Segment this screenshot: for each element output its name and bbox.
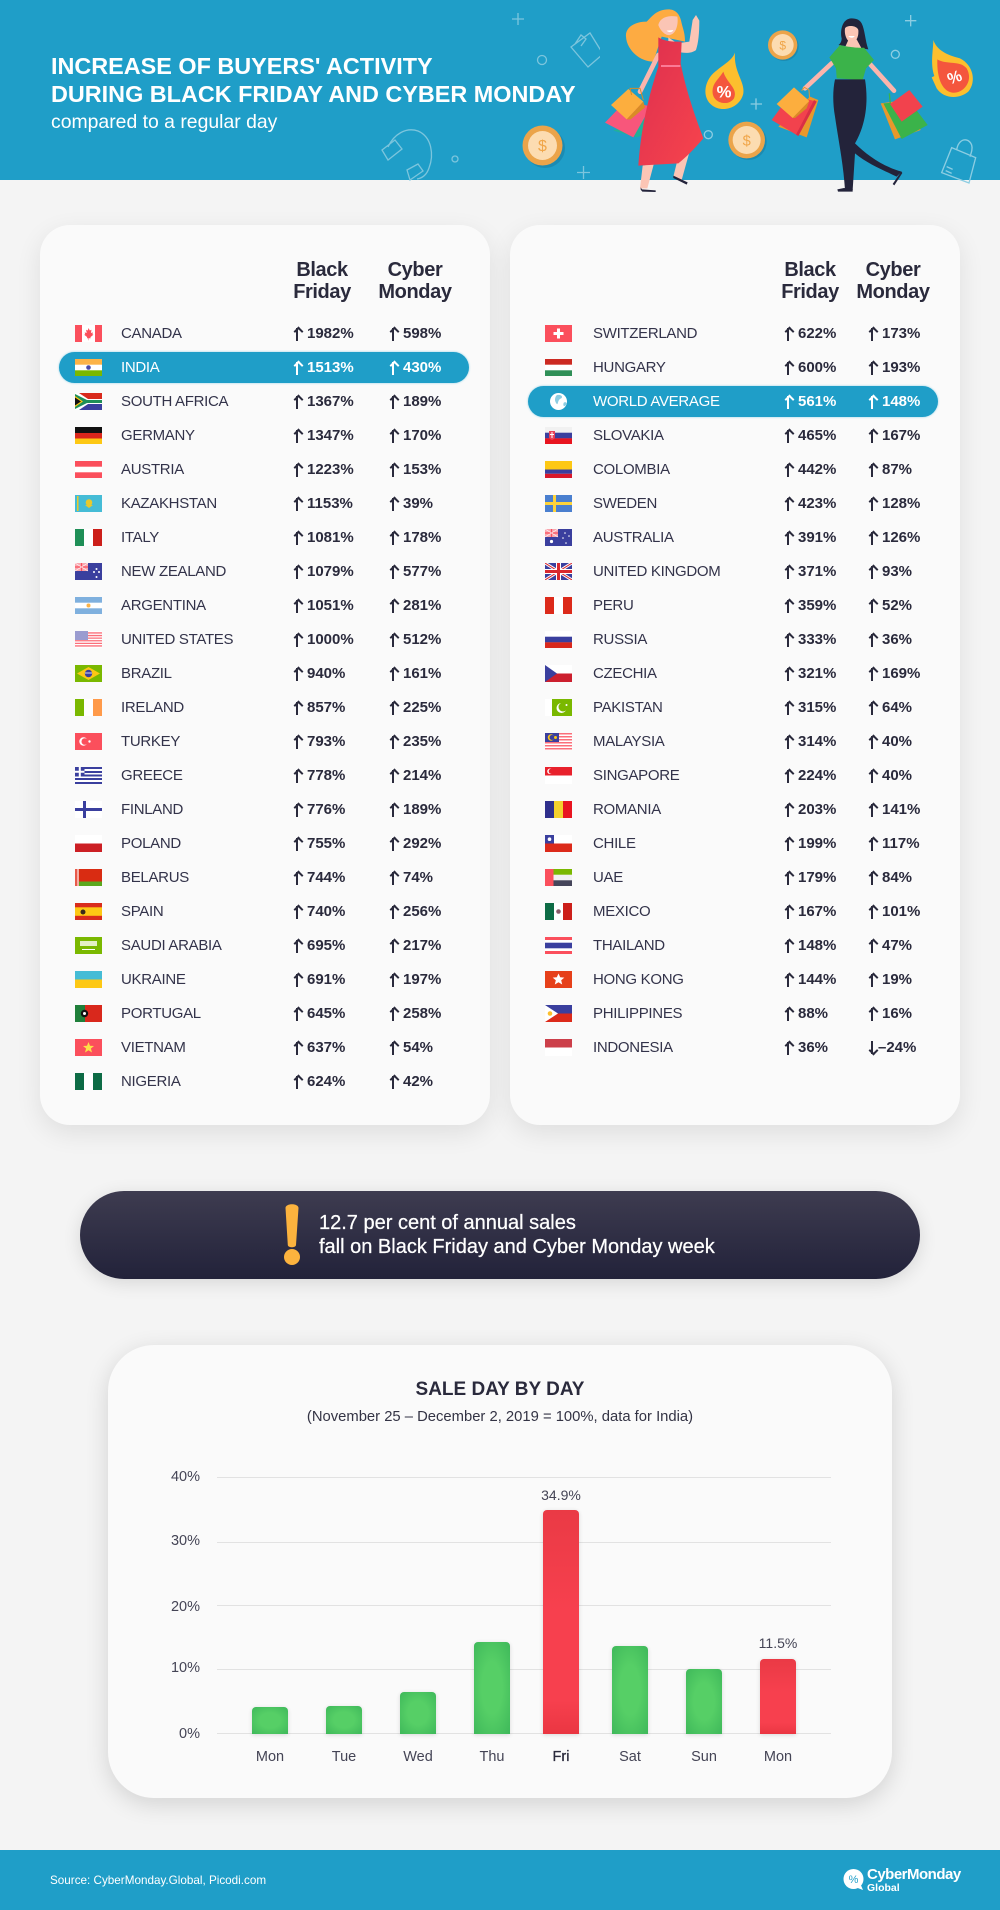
coin top: [768, 30, 799, 61]
woman in red dress: [605, 9, 703, 192]
row: Peru: 52%: [882, 597, 912, 614]
column heading: Cyber Monday left: Cyber: [388, 259, 442, 281]
row: Malaysia: [510, 733, 960, 750]
row: Belarus: 744%: [307, 869, 345, 886]
row: Saudi Arabia: 695%: [307, 937, 345, 954]
subtitle: compared to a regular day: [51, 111, 277, 133]
y axis label 20%: 20%: [171, 1599, 200, 1615]
flag: Australia: [545, 529, 572, 546]
x label Thu: Thu: [480, 1749, 504, 1765]
title: INCREASE OF BUYERS' ACTIVITY: [51, 53, 433, 79]
row: Chile: 117%: [882, 835, 920, 852]
row: Hong Kong: 19%: [882, 971, 912, 988]
highlight: World average row: [528, 386, 938, 417]
row: Hungary: HUNGARY: [593, 359, 666, 376]
row: Belarus: BELARUS: [121, 869, 189, 886]
row: Turkey: 793%: [307, 733, 345, 750]
column heading: Cyber Monday left: [378, 259, 452, 303]
row: Nigeria: NIGERIA: [121, 1073, 181, 1090]
row: Malaysia: 40%: [882, 733, 912, 750]
row: Hong Kong: 144%: [798, 971, 836, 988]
flag: Finland: [75, 801, 102, 818]
row: Saudi Arabia: 217%: [403, 937, 441, 954]
row: New Zealand: 1079%: [307, 563, 354, 580]
logo: CyberMonday Global: [843, 1867, 963, 1895]
flag: Chile: [545, 835, 572, 852]
row: Indonesia: –24%: [878, 1039, 916, 1056]
bar: Sat: [612, 1646, 648, 1734]
callout text: 12.7 per cent of annual sales: [319, 1212, 576, 1234]
row: Russia: RUSSIA: [593, 631, 647, 648]
flag: India: [75, 359, 102, 376]
row: Nigeria: 624%: [307, 1073, 345, 1090]
flag: Belarus: [75, 869, 102, 886]
row: United States: 512%: [403, 631, 441, 648]
flag: Germany: [75, 427, 102, 444]
x label Mon: Mon: [764, 1749, 792, 1765]
row: Mexico: MEXICO: [593, 903, 650, 920]
row: Hungary: [510, 359, 960, 376]
row: Mexico: [510, 903, 960, 920]
row: Austria: 1223%: [307, 461, 354, 478]
row: Singapore: [510, 767, 960, 784]
flag: Sweden: [545, 495, 572, 512]
row: World average: WORLD AVERAGE: [593, 393, 720, 410]
coin left: $: [538, 138, 547, 155]
row: Russia: 333%: [798, 631, 836, 648]
row: Belarus: [40, 869, 490, 886]
flag: Spain: [75, 903, 102, 920]
row: Vietnam: VIETNAM: [121, 1039, 186, 1056]
row: Poland: [75, 835, 441, 852]
row: Brazil: BRAZIL: [121, 665, 172, 682]
row: UAE: [510, 869, 960, 886]
row: Spain: [40, 903, 490, 920]
row: South Africa: SOUTH AFRICA: [121, 393, 228, 410]
icon: globe: [545, 393, 572, 410]
coin left: [522, 126, 565, 168]
row: India: 1513%: [307, 359, 354, 376]
row: Portugal: PORTUGAL: [121, 1005, 201, 1022]
discount flame left: %: [717, 82, 732, 101]
flag: Canada: [75, 325, 102, 342]
row: New Zealand: NEW ZEALAND: [121, 563, 226, 580]
discount flame left: [705, 53, 743, 109]
logo: CyberMonday Global: %: [849, 1874, 859, 1886]
row: World average: 561%: [798, 393, 836, 410]
column heading: Black Friday right: Black: [784, 259, 836, 281]
row: Sweden: 423%: [798, 495, 836, 512]
row: Romania: [510, 801, 960, 818]
y axis label 30%: 30%: [171, 1533, 200, 1549]
column heading: Black Friday left: Black: [296, 259, 348, 281]
row: Sweden: 128%: [882, 495, 920, 512]
flag: Saudi Arabia: [75, 937, 102, 954]
row: Ukraine: [40, 971, 490, 988]
row: Czechia: CZECHIA: [593, 665, 657, 682]
flag: Romania: [545, 801, 572, 818]
bar: Fri: [543, 1510, 579, 1734]
chart subtitle: (November 25 – December 2, 2019 = 100%, data for India): [307, 1409, 693, 1425]
row: Russia: 36%: [882, 631, 912, 648]
row: Romania: 203%: [798, 801, 836, 818]
row: Thailand: THAILAND: [593, 937, 665, 954]
flag: Argentina: [75, 597, 102, 614]
flag: Italy: [75, 529, 102, 546]
flag: United States: [75, 631, 102, 647]
row: Hungary: 600%: [798, 359, 836, 376]
row: Poland: 292%: [403, 835, 441, 852]
row: Vietnam: 54%: [403, 1039, 433, 1056]
row: UAE: 179%: [798, 869, 836, 886]
row: United States: 1000%: [307, 631, 354, 648]
flag: Colombia: [545, 461, 572, 478]
flag: Ireland: [75, 699, 102, 716]
row: Germany: GERMANY: [121, 427, 195, 444]
row: Italy: ITALY: [121, 529, 159, 546]
flag: Singapore: [545, 767, 572, 784]
row: Pakistan: 315%: [798, 699, 836, 716]
row: Malaysia: 314%: [798, 733, 836, 750]
row: Vietnam: [40, 1039, 490, 1056]
row: United Kingdom: [510, 563, 960, 580]
row: UAE: 84%: [882, 869, 912, 886]
row: Chile: 199%: [798, 835, 836, 852]
row: Czechia: 321%: [798, 665, 836, 682]
row: Peru: 359%: [798, 597, 836, 614]
bar: Tue: [326, 1706, 362, 1734]
flag: Nigeria: [75, 1073, 102, 1090]
row: Philippines: 88%: [798, 1005, 828, 1022]
x label Tue: Tue: [332, 1749, 356, 1765]
row: Czechia: [510, 665, 960, 682]
row: Ukraine: 197%: [403, 971, 441, 988]
row: Canada: CANADA: [121, 325, 182, 342]
row: India: INDIA: [121, 359, 160, 376]
row: Poland: POLAND: [121, 835, 181, 852]
flag: South Africa: [75, 393, 102, 410]
row: South Africa: [75, 393, 441, 410]
row: Saudi Arabia: SAUDI ARABIA: [121, 937, 222, 954]
row: Pakistan: [510, 699, 960, 716]
callout text: fall on Black Friday and Cyber Monday week: [319, 1236, 715, 1258]
row: Philippines: PHILIPPINES: [593, 1005, 682, 1022]
row: Colombia: 87%: [882, 461, 912, 478]
row: Greece: GREECE: [121, 767, 183, 784]
row: Thailand: 148%: [798, 937, 836, 954]
flag: Brazil: [75, 665, 102, 682]
row: Germany: 170%: [403, 427, 441, 444]
row: Turkey: 235%: [403, 733, 441, 750]
row: Hungary: 193%: [882, 359, 920, 376]
flag: Malaysia: [545, 733, 572, 750]
row: Switzerland: 622%: [798, 325, 836, 342]
row: Indonesia: INDONESIA: [593, 1039, 673, 1056]
row: Argentina: ARGENTINA: [121, 597, 206, 614]
row: Nigeria: [40, 1073, 490, 1090]
flag: Thailand: [545, 937, 572, 954]
row: New Zealand: [75, 563, 441, 580]
flag: New Zealand: [75, 563, 102, 580]
row: Mexico: 167%: [798, 903, 836, 920]
panel: left table: [40, 225, 490, 1125]
flag: Hungary: [545, 359, 572, 376]
row: Slovakia: SLOVAKIA: [593, 427, 664, 444]
callout text: [319, 1211, 715, 1259]
bar: Thu: [474, 1642, 510, 1734]
row: Belarus: 74%: [403, 869, 433, 886]
column heading: Cyber Monday right: Monday: [856, 281, 930, 303]
row: Nigeria: 42%: [403, 1073, 433, 1090]
row: Greece: 214%: [403, 767, 441, 784]
row: Slovakia: [510, 427, 960, 444]
row: Indonesia: [510, 1039, 960, 1056]
row: Kazakhstan: KAZAKHSTAN: [121, 495, 217, 512]
row: Kazakhstan: 39%: [403, 495, 433, 512]
row: Australia: 126%: [882, 529, 920, 546]
row: Colombia: COLOMBIA: [593, 461, 670, 478]
row: United States: UNITED STATES: [121, 631, 233, 648]
source text: Source: CyberMonday.Global, Picodi.com: [50, 1874, 266, 1887]
y axis label 0%: 0%: [179, 1726, 200, 1742]
decorations: [704, 15, 976, 183]
column heading: Cyber Monday left: Monday: [378, 281, 452, 303]
row: Chile: CHILE: [593, 835, 636, 852]
row: Greece: [75, 767, 441, 784]
row: Spain: 256%: [403, 903, 441, 920]
row: Spain: 740%: [307, 903, 345, 920]
row: Colombia: [510, 461, 960, 478]
flag: Indonesia: [545, 1039, 572, 1056]
row: Indonesia: 36%: [798, 1039, 828, 1056]
flag: Pakistan: [545, 699, 572, 716]
flag: Kazakhstan: [75, 495, 102, 512]
row: United States: [75, 631, 441, 648]
row: Mexico: 101%: [882, 903, 920, 920]
row: Romania: 141%: [882, 801, 920, 818]
row: Ireland: IRELAND: [121, 699, 184, 716]
icon: decorative outline shopping items: [381, 13, 600, 181]
value label 11.5%: 11.5%: [759, 1635, 797, 1651]
row: Finland: FINLAND: [121, 801, 183, 818]
flag: Turkey: [75, 733, 102, 750]
flag: Philippines: [545, 1005, 572, 1022]
row: Ukraine: UKRAINE: [121, 971, 186, 988]
row: New Zealand: 577%: [403, 563, 441, 580]
bar: Mon: [252, 1707, 288, 1734]
column heading: Black Friday right: [781, 259, 840, 303]
row: Finland: [75, 801, 441, 818]
row: Canada: 1982%: [307, 325, 354, 342]
row: Germany: 1347%: [307, 427, 354, 444]
row: Austria: AUSTRIA: [121, 461, 184, 478]
row: Saudi Arabia: [40, 937, 490, 954]
logo: CyberMonday Global: CyberMonday: [867, 1866, 961, 1883]
row: Italy: 1081%: [307, 529, 354, 546]
y axis label 40%: 40%: [171, 1469, 200, 1485]
row: Singapore: 40%: [882, 767, 912, 784]
row: Argentina: 281%: [403, 597, 441, 614]
coin top: $: [779, 38, 786, 52]
row: Thailand: 47%: [882, 937, 912, 954]
row: Ireland: [75, 699, 441, 716]
row: Philippines: 16%: [882, 1005, 912, 1022]
x label Fri: Fri: [553, 1749, 569, 1765]
title: [51, 53, 576, 107]
row: Finland: 776%: [307, 801, 345, 818]
row: Romania: ROMANIA: [593, 801, 661, 818]
x label Sat: Sat: [619, 1749, 641, 1765]
panel: right table: [510, 225, 960, 1125]
highlight: India row: [59, 352, 469, 383]
flag: Portugal: [75, 1005, 102, 1022]
logo: CyberMonday Global: Global: [867, 1882, 900, 1894]
woman in green top: [772, 18, 928, 192]
row: Malaysia: MALAYSIA: [593, 733, 665, 750]
column heading: Cyber Monday right: [856, 259, 930, 303]
row: Italy: [75, 529, 441, 546]
row: Czechia: 169%: [882, 665, 920, 682]
row: Australia: AUSTRALIA: [593, 529, 674, 546]
row: Switzerland: SWITZERLAND: [593, 325, 697, 342]
row: Germany: [75, 427, 441, 444]
row: South Africa: 189%: [403, 393, 441, 410]
row: Colombia: 442%: [798, 461, 836, 478]
row: Sweden: SWEDEN: [593, 495, 657, 512]
row: Switzerland: [510, 325, 960, 342]
row: Peru: [510, 597, 960, 614]
row: Vietnam: 637%: [307, 1039, 345, 1056]
row: Kazakhstan: 1153%: [307, 495, 353, 512]
flag: Greece: [75, 767, 102, 784]
row: Greece: 778%: [307, 767, 345, 784]
row: India: [75, 359, 441, 376]
row: Austria: [75, 461, 441, 478]
row: Portugal: 645%: [307, 1005, 345, 1022]
chart title: SALE DAY BY DAY: [416, 1379, 584, 1400]
flag: Hong Kong: [545, 971, 572, 988]
flag: Vietnam: [75, 1039, 102, 1056]
flag: Austria: [75, 461, 102, 478]
row: Argentina: [75, 597, 441, 614]
row: Slovakia: 465%: [798, 427, 836, 444]
flag: Slovakia: [545, 427, 572, 444]
row: Philippines: [510, 1005, 960, 1022]
flag: Mexico: [545, 903, 572, 920]
row: Brazil: 161%: [403, 665, 441, 682]
row: UAE: UAE: [593, 869, 623, 886]
discount flame right: %: [945, 68, 965, 89]
row: World average: 148%: [882, 393, 920, 410]
x label Wed: Wed: [403, 1749, 433, 1765]
row: Australia: [510, 529, 960, 546]
row: Portugal: [40, 1005, 490, 1022]
row: Chile: [510, 835, 960, 852]
row: Brazil: [75, 665, 441, 682]
coin bottom: [728, 122, 767, 160]
coin bottom: $: [743, 133, 751, 149]
column heading: Cyber Monday right: Cyber: [866, 259, 920, 281]
icon: exclamation mark: [283, 1204, 301, 1266]
row: Slovakia: 167%: [882, 427, 920, 444]
row: Australia: 391%: [798, 529, 836, 546]
row: Italy: 178%: [403, 529, 441, 546]
flag: United Kingdom: [545, 563, 572, 580]
row: Kazakhstan: [75, 495, 433, 512]
row: Ireland: 225%: [403, 699, 441, 716]
row: Poland: 755%: [307, 835, 345, 852]
flag: Poland: [75, 844, 102, 852]
bar: Sun: [686, 1669, 722, 1734]
row: Hong Kong: [510, 971, 960, 988]
column heading: Black Friday left: [293, 259, 352, 303]
value label 34.9%: 34.9%: [541, 1487, 581, 1503]
row: Canada: 598%: [403, 325, 441, 342]
row: Ireland: 857%: [307, 699, 345, 716]
row: Turkey: [75, 733, 441, 750]
column heading: Black Friday right: Friday: [781, 281, 839, 303]
row: World average: [510, 393, 960, 410]
row: Portugal: 258%: [403, 1005, 441, 1022]
flag: UAE: [545, 869, 572, 886]
row: Spain: SPAIN: [121, 903, 163, 920]
row: Pakistan: 64%: [882, 699, 912, 716]
row: Ukraine: 691%: [307, 971, 345, 988]
row: South Africa: 1367%: [307, 393, 354, 410]
callout: [80, 1191, 920, 1279]
illustration: shoppers, coins and discount flames: [605, 9, 976, 192]
column heading: Black Friday left: Friday: [293, 281, 351, 303]
row: Thailand: [510, 937, 960, 954]
discount flame right: [932, 40, 973, 97]
x label Mon: Mon: [256, 1749, 284, 1765]
header banner: [0, 0, 1000, 180]
row: United Kingdom: 371%: [798, 563, 836, 580]
y axis label 10%: 10%: [171, 1660, 200, 1676]
row: United Kingdom: UNITED KINGDOM: [593, 563, 720, 580]
flag: Russia: [545, 631, 572, 648]
row: Singapore: SINGAPORE: [593, 767, 680, 784]
row: Austria: 153%: [403, 461, 441, 478]
row: Sweden: [510, 495, 960, 512]
row: Canada: [75, 325, 441, 342]
row: Turkey: TURKEY: [121, 733, 180, 750]
title: DURING BLACK FRIDAY AND CYBER MONDAY: [51, 81, 576, 107]
row: Hong Kong: HONG KONG: [593, 971, 684, 988]
bar: Cyber Mon: [760, 1659, 796, 1734]
row: Brazil: 940%: [307, 665, 345, 682]
row: Switzerland: 173%: [882, 325, 920, 342]
bar: Wed: [400, 1692, 436, 1734]
row: Argentina: 1051%: [307, 597, 354, 614]
row: Russia: [510, 631, 960, 648]
panel: sale day by day chart: [108, 1345, 892, 1798]
row: Peru: PERU: [593, 597, 633, 614]
footer: [0, 1850, 1000, 1910]
row: Finland: 189%: [403, 801, 441, 818]
flag: Ukraine: [75, 971, 102, 988]
flag: Peru: [545, 597, 572, 614]
flag: Switzerland: [545, 325, 572, 342]
row: United Kingdom: 93%: [882, 563, 912, 580]
row: Pakistan: PAKISTAN: [593, 699, 663, 716]
flag: Czechia: [545, 665, 572, 682]
x label Sun: Sun: [691, 1749, 717, 1765]
row: India: 430%: [403, 359, 441, 376]
row: Singapore: 224%: [798, 767, 836, 784]
